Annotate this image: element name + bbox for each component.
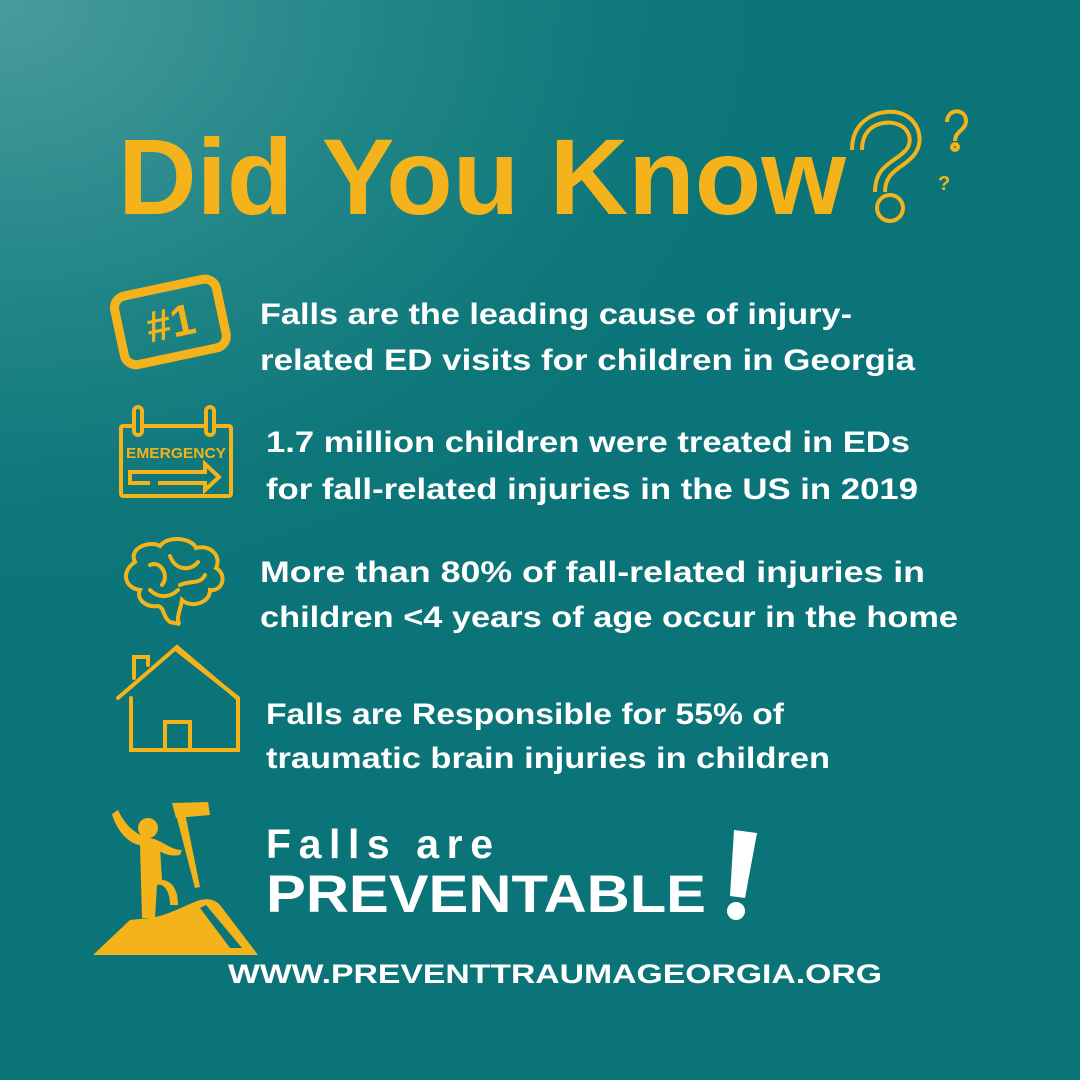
icon: house <box>118 647 238 750</box>
callout: falls are preventable: Falls are <box>266 821 493 867</box>
icon: question marks <box>852 111 966 221</box>
text block 3 <box>260 556 958 634</box>
icon: #1 badge <box>112 277 229 367</box>
icon: climber with flag <box>93 802 258 955</box>
callout: falls are preventable <box>266 821 757 924</box>
text block 2 <box>266 426 918 506</box>
website url: WWW.PREVENTTRAUMAGEORGIA.ORG <box>228 959 882 989</box>
text block 4: traumatic brain injuries in children <box>266 742 830 775</box>
text block 4 <box>266 698 830 775</box>
icon: brain <box>126 539 223 624</box>
text block 3: children <4 years of age occur in the home <box>260 601 958 634</box>
text block 4: Falls are Responsible for 55% of <box>266 698 785 731</box>
text block 2: 1.7 million children were treated in EDs <box>266 426 910 459</box>
callout: falls are preventable: PREVENTABLE <box>266 865 706 924</box>
text block 2: for fall-related injuries in the US in 2019 <box>266 473 918 506</box>
icon: emergency sign: EMERGENCY <box>126 445 226 462</box>
text block 1: Falls are the leading cause of injury- <box>260 298 852 331</box>
title: Did You Know <box>118 116 847 237</box>
icon: emergency sign <box>121 407 231 496</box>
icon: question marks: ? <box>938 173 950 195</box>
icon: #1 badge: #1 <box>142 294 200 352</box>
text block 1: related ED visits for children in Georgia <box>260 344 915 377</box>
text block 3: More than 80% of fall-related injuries in <box>260 556 925 589</box>
text block 1 <box>260 298 915 377</box>
